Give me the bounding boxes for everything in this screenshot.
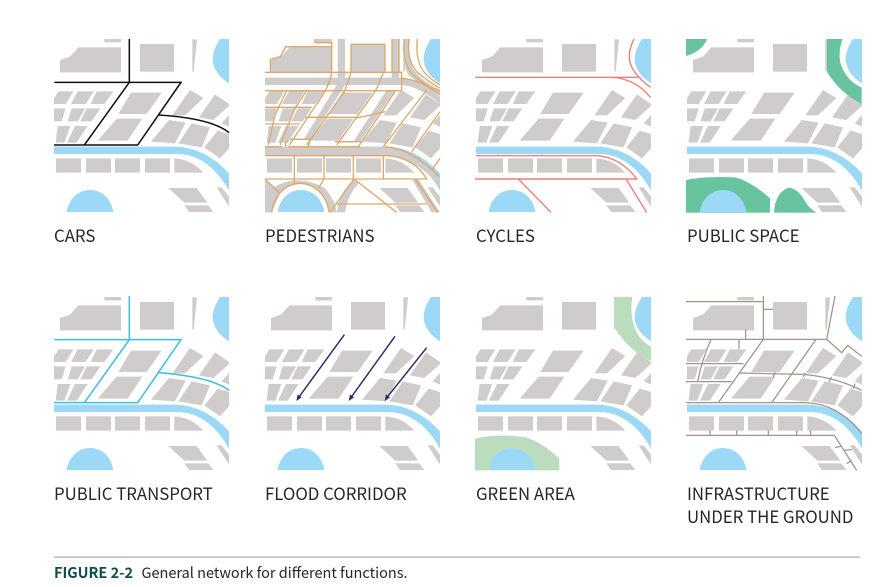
label: public transport: PUBLIC TRANSPORT — [54, 481, 213, 505]
label: public space: PUBLIC SPACE — [687, 223, 800, 247]
panel: public transport — [54, 296, 229, 470]
panel: flood corridor — [265, 296, 440, 470]
cycles base map — [476, 38, 651, 212]
panel: cars — [54, 38, 229, 212]
public transport base map — [54, 296, 229, 470]
public space pond — [700, 190, 746, 212]
label: pedestrians: PEDESTRIANS — [265, 223, 375, 247]
infrastructure base map — [687, 296, 862, 470]
flood flow arrows — [296, 335, 427, 401]
cars base map — [54, 38, 229, 212]
panel: public space — [686, 38, 862, 213]
public transport line network — [54, 296, 229, 403]
flood corridor base map — [265, 296, 440, 470]
green area base map — [476, 296, 651, 470]
label: cycles: CYCLES — [476, 223, 535, 247]
pedestrians base map — [265, 38, 440, 212]
panel: infrastructure under the ground — [686, 296, 862, 470]
label: infrastructure under the ground: INFRASTRUCTURE — [687, 481, 830, 505]
pedestrian road strips — [265, 39, 440, 212]
cars road network — [54, 39, 229, 145]
green area shapes — [475, 297, 651, 470]
label: cars: CARS — [54, 223, 95, 247]
panel: pedestrians — [265, 38, 440, 212]
public space green areas — [686, 39, 862, 213]
caption rule — [54, 556, 860, 558]
panel: green area — [475, 296, 651, 470]
figure caption: General network for different functions. — [142, 562, 408, 583]
panel: cycles — [475, 38, 651, 212]
cycle lane network — [475, 39, 651, 212]
public space base map — [687, 38, 862, 212]
figure caption: FIGURE 2-2 — [54, 562, 133, 583]
label: flood corridor: FLOOD CORRIDOR — [265, 481, 407, 505]
pedestrian path network — [265, 39, 440, 212]
underground utility lines — [686, 296, 862, 470]
label: green area: GREEN AREA — [476, 481, 576, 505]
label: infrastructure under the ground: UNDER THE GROUND — [687, 504, 853, 528]
green area pond — [489, 448, 535, 470]
